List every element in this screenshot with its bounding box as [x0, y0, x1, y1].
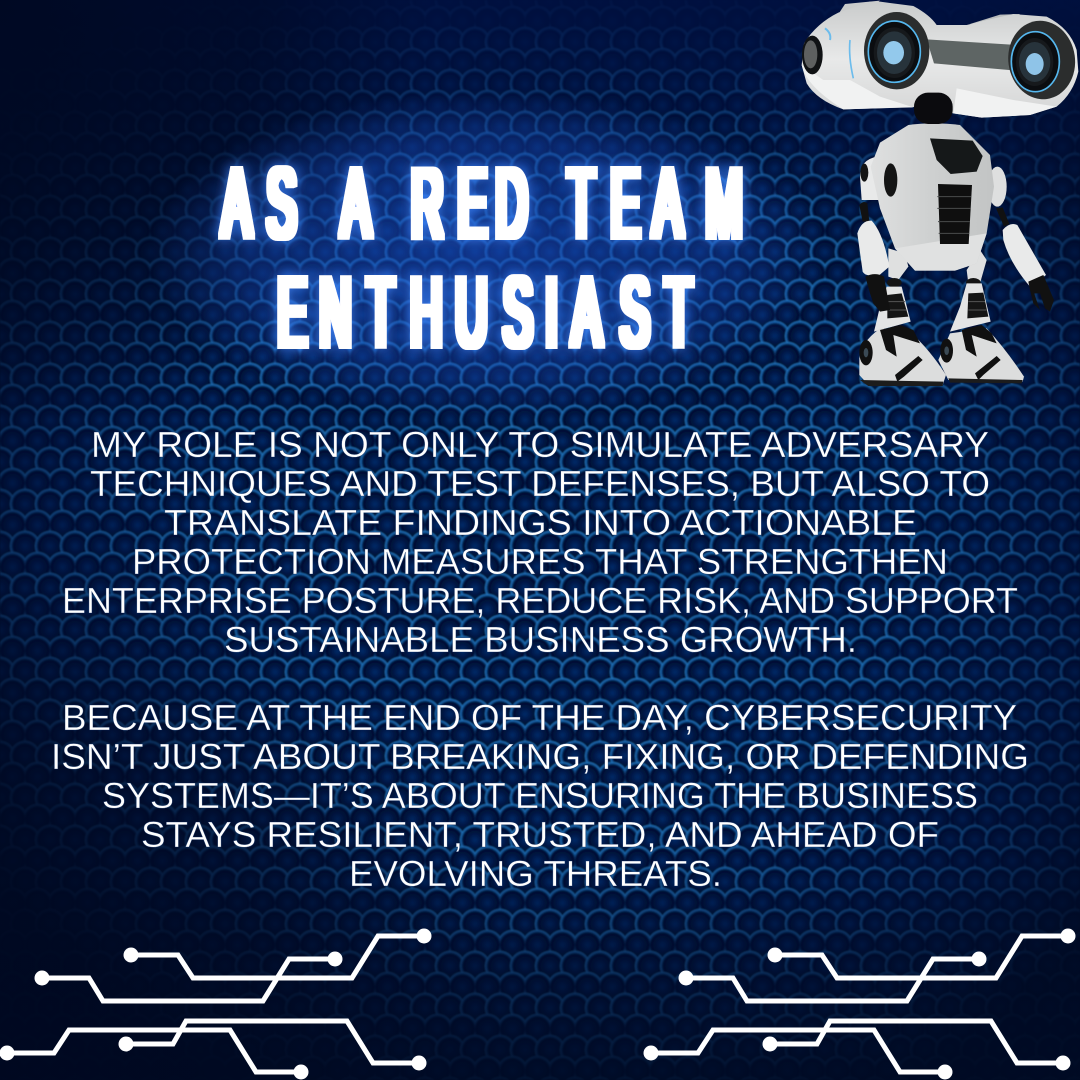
robot head band	[927, 39, 1017, 71]
title: ENTHUSIAST	[278, 258, 692, 368]
robot neck	[914, 93, 953, 124]
paragraph two: BECAUSE AT THE END OF THE DAY, CYBERSECURITY	[62, 697, 1017, 738]
paragraph one	[62, 424, 1018, 660]
robot head	[802, 1, 1080, 118]
robot feet	[859, 325, 1024, 386]
robot chest vent	[937, 184, 972, 244]
robot right eye	[1003, 16, 1080, 104]
paragraph two	[51, 697, 1029, 894]
paragraph one: SUSTAINABLE BUSINESS GROWTH.	[224, 619, 857, 660]
paragraph one: TRANSLATE FINDINGS INTO ACTIONABLE	[164, 502, 917, 543]
robot torso	[860, 123, 1007, 271]
robot chest visor	[930, 138, 983, 174]
robot illustration	[802, 1, 1080, 386]
robot left eye	[864, 12, 929, 89]
robot left arm	[857, 202, 890, 312]
circuit graphic: bottom left	[0, 928, 432, 1080]
robot right arm	[996, 207, 1054, 312]
paragraph two: EVOLVING THREATS.	[349, 853, 722, 894]
circuit graphic: bottom right	[644, 928, 1076, 1080]
robot side lens	[802, 36, 823, 74]
paragraph one: PROTECTION MEASURES THAT STRENGTHEN	[132, 541, 948, 582]
title: AS A RED TEAM	[222, 149, 742, 259]
paragraph one: ENTERPRISE POSTURE, REDUCE RISK, AND SUPPORT	[62, 580, 1018, 621]
robot legs	[874, 248, 991, 332]
paragraph two: SYSTEMS—IT’S ABOUT ENSURING THE BUSINESS	[102, 775, 978, 816]
paragraph one: MY ROLE IS NOT ONLY TO SIMULATE ADVERSARY	[91, 424, 989, 465]
paragraph one: TECHNIQUES AND TEST DEFENSES, BUT ALSO TO	[90, 463, 990, 504]
paragraph two: STAYS RESILIENT, TRUSTED, AND AHEAD OF	[141, 814, 939, 855]
title	[222, 149, 742, 368]
paragraph two: ISN’T JUST ABOUT BREAKING, FIXING, OR DEFENDING	[51, 736, 1029, 777]
body text	[51, 424, 1029, 894]
